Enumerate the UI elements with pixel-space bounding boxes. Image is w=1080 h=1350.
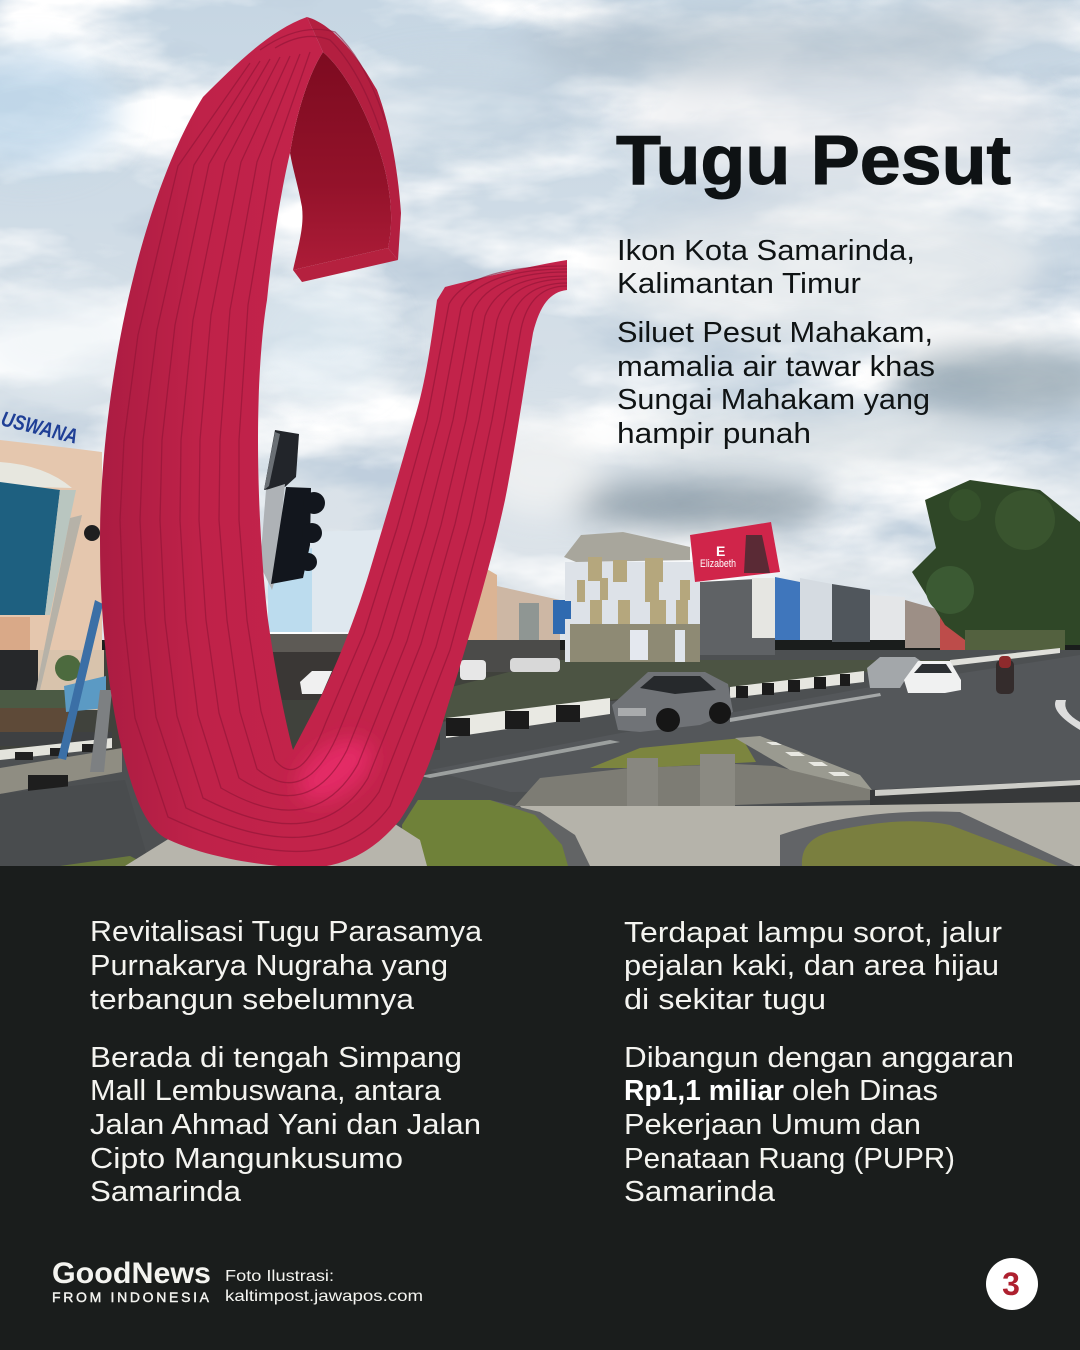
text block: revitalisation: Revitalisasi Tugu Parasamya [90, 916, 483, 948]
panel: dark info section [0, 866, 1080, 1350]
ribbon front [100, 17, 567, 868]
billboard: Elizabeth [700, 558, 736, 570]
logo: GoodNews from Indonesia [52, 1257, 211, 1305]
text block: icon of Samarinda: Ikon Kota Samarinda, [617, 235, 915, 267]
text block: location: Cipto Mangunkusumo [90, 1143, 403, 1175]
middle buildings [268, 530, 567, 700]
text block: revitalisation: terbangun sebelumnya [90, 984, 415, 1016]
photo credit: kaltimpost.jawapos.com [225, 1288, 423, 1305]
text block: budget: Dibangun dengan anggaran [624, 1042, 1014, 1074]
logo: GoodNews from Indonesia: GoodNews [52, 1257, 211, 1290]
white car behind sculpture [300, 671, 332, 694]
highlight on lower curve [293, 734, 376, 806]
text block: icon of Samarinda: Kalimantan Timur [617, 268, 861, 300]
text block: silhouette description: hampir punah [617, 418, 811, 450]
text block: location [90, 1042, 481, 1208]
road and ground [0, 650, 1080, 866]
concrete island [515, 736, 1080, 866]
text block: budget [624, 1042, 1014, 1208]
arch end bevel [293, 248, 398, 282]
poles left [36, 515, 112, 772]
text block: budget: Samarinda [624, 1176, 776, 1208]
billboard [690, 522, 780, 582]
text block: silhouette description [617, 317, 935, 450]
ribbed strands [120, 29, 567, 851]
planting beds [60, 800, 1075, 866]
mall building left [0, 440, 122, 794]
traffic light and sign [260, 430, 325, 590]
text block: location: Berada di tengah Simpang [90, 1042, 462, 1074]
text block: silhouette description: Sungai Mahakam yang [617, 384, 930, 416]
logo: GoodNews from Indonesia: FROM INDONESIA [52, 1289, 210, 1305]
text block: facilities: Terdapat lampu sorot, jalur [624, 917, 1002, 949]
text block: silhouette description: Siluet Pesut Mahakam, [617, 317, 933, 349]
billboard: E [716, 543, 725, 559]
photo: Tugu Pesut monument [0, 0, 1080, 868]
cars and motorcycle [612, 656, 1014, 732]
text: mall sign: USWANA [0, 408, 80, 449]
arch rim [307, 17, 401, 260]
text block: location: Samarinda [90, 1176, 242, 1208]
row of shophouses [700, 577, 965, 655]
text block: silhouette description: mamalia air tawar khas [617, 351, 935, 383]
photo credit [225, 1268, 423, 1305]
text block: budget: Rp1,1 miliar [624, 1075, 784, 1107]
sculpture: red ribbon [100, 17, 567, 868]
base of sculpture [125, 824, 427, 866]
text block: revitalisation [90, 916, 483, 1016]
median curbs [420, 648, 1080, 778]
corner building right [553, 532, 700, 662]
text block: revitalisation: Purnakarya Nugraha yang [90, 950, 448, 982]
text block: icon of Samarinda [617, 235, 915, 300]
text block: location: Jalan Ahmad Yani dan Jalan [90, 1109, 481, 1141]
heading: Tugu Pesut [616, 121, 1011, 199]
text block: budget: Pekerjaan Umum dan [624, 1109, 921, 1141]
trees [912, 480, 1080, 650]
text block: facilities: pejalan kaki, dan area hijau [624, 950, 999, 982]
page number badge [986, 1258, 1038, 1310]
text block: facilities: di sekitar tugu [624, 984, 826, 1016]
text block: budget: oleh Dinas [792, 1075, 938, 1107]
text block: location: Mall Lembuswana, antara [90, 1075, 442, 1107]
photo credit: Foto Ilustrasi: [225, 1268, 334, 1285]
sky with clouds [0, 0, 1080, 640]
arch inner underside [290, 52, 391, 270]
page number badge: 3 [1002, 1266, 1020, 1302]
text block: budget: Penataan Ruang (PUPR) [624, 1143, 955, 1175]
text block: facilities [624, 917, 1002, 1016]
